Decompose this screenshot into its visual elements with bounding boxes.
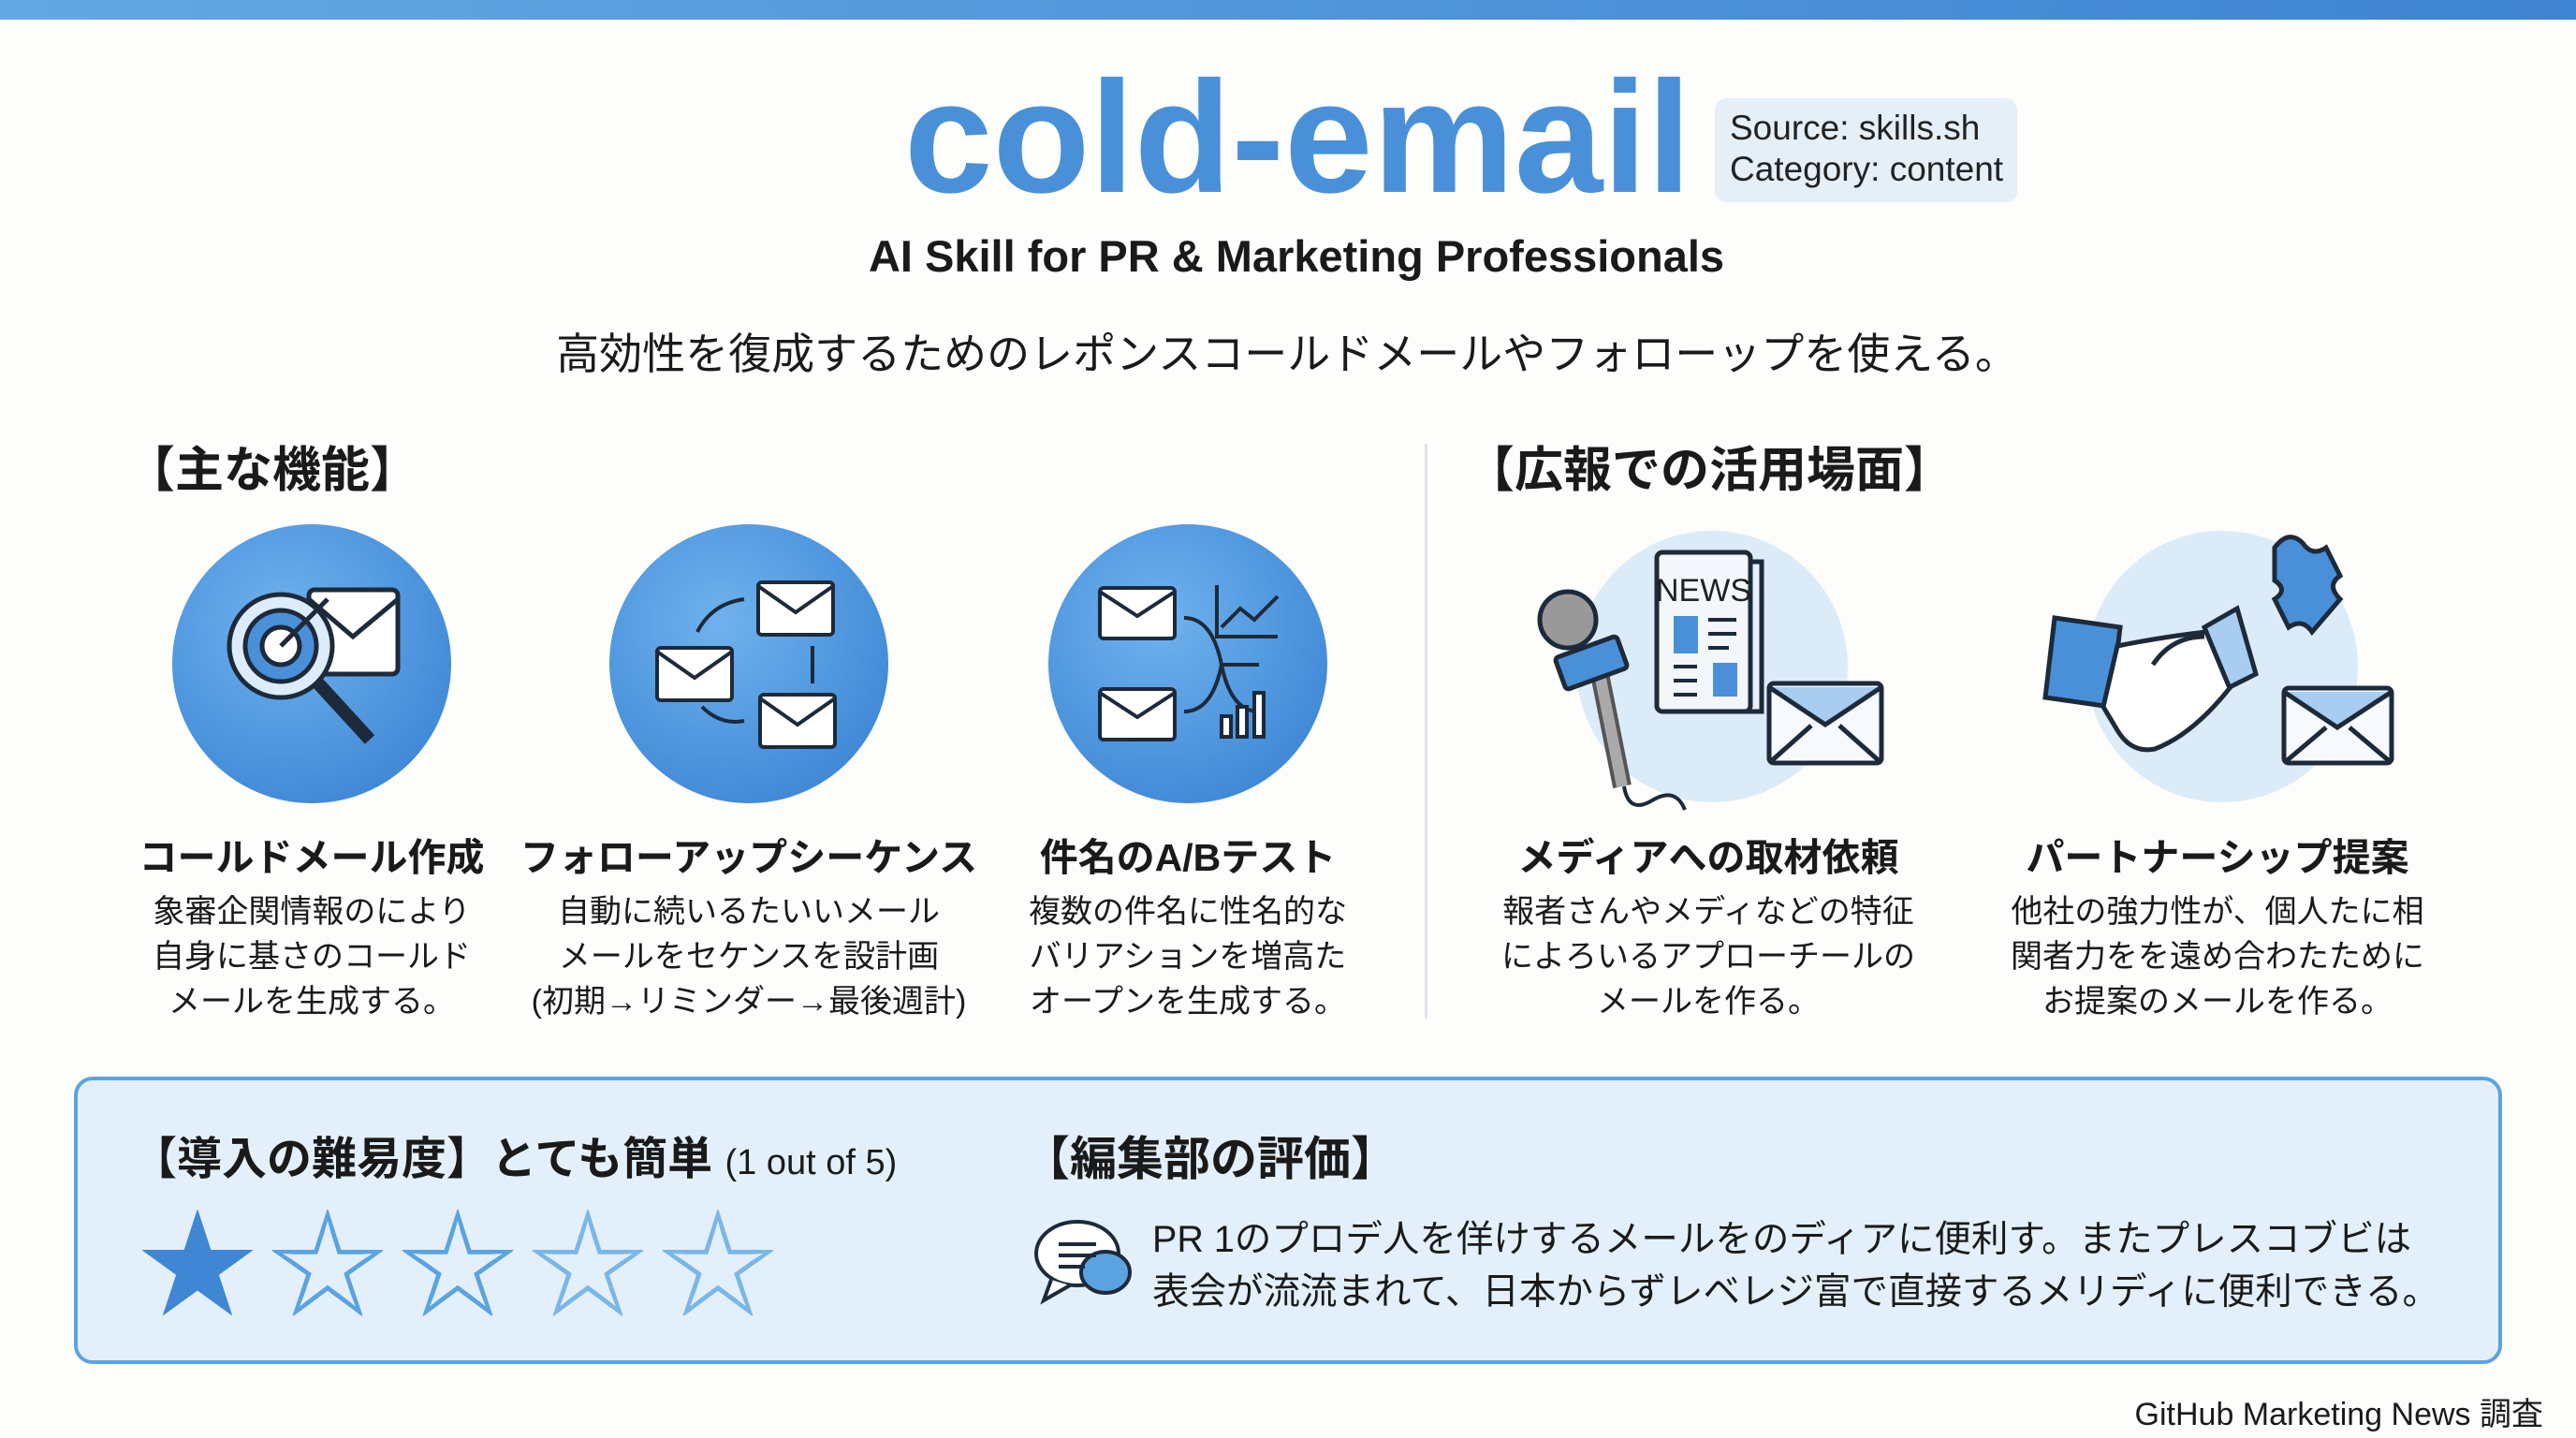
- feature 3: 件名のA/Bテスト: [1040, 836, 1336, 879]
- feature 2: 自動に続いるたいいメール: [558, 894, 940, 930]
- review text: 表会が流流まれて、日本からずレベレジ富で直接するメリディに便利できる。: [1152, 1271, 2439, 1313]
- use case 1: [1501, 836, 1915, 1020]
- tagline: 高効性を復成するためのレポンスコールドメールやフォローップを使える。: [556, 330, 2018, 378]
- feature 2: メールをセケンスを設計画: [559, 939, 939, 975]
- title: cold-email: [904, 49, 1691, 227]
- feature 1: コールドメール作成: [139, 836, 485, 879]
- stars: ★☆☆☆☆: [138, 1200, 788, 1334]
- icon: speech bubble: [1034, 1220, 1132, 1305]
- feature 3: 複数の件名に性名的な: [1029, 894, 1347, 930]
- heading: PR use: 【広報での活用場面】: [1466, 444, 1953, 498]
- icon: A/B test: [1048, 524, 1327, 803]
- icon: partnership: [2045, 531, 2392, 802]
- use case 2: 関者力をを遠め合わたために: [2011, 939, 2424, 975]
- review text: PR 1のプロデ人を佯けするメールをのディアに便利す。またプレスコブビは: [1152, 1219, 2411, 1260]
- source box: [1715, 98, 2017, 202]
- use case 2: パートナーシップ提案: [2026, 836, 2409, 879]
- feature 3: オープンを生成する。: [1030, 984, 1346, 1020]
- source box: Category: content: [1730, 150, 2003, 188]
- use case 1: メールを作る。: [1597, 984, 1820, 1020]
- use case 1: によろいるアプローチールの: [1501, 939, 1915, 975]
- feature 2: (初期→リミンダー→最後週計): [532, 984, 966, 1020]
- icon: target search: [172, 524, 451, 803]
- icon: media interview: [1540, 531, 1881, 810]
- feature 1: 象審企関情報のにより: [153, 894, 471, 930]
- divider: [1425, 444, 1427, 1019]
- use case 1: メディアへの取材依頼: [1517, 836, 1899, 879]
- feature 2: [520, 836, 977, 1020]
- feature 3: バリアションを増高た: [1030, 939, 1346, 975]
- footer: GitHub Marketing News 調査: [2135, 1397, 2543, 1432]
- feature 1: メールを生成する。: [168, 984, 455, 1020]
- icon: media interview: NEWS: [1656, 573, 1751, 609]
- source box: Source: skills.sh: [1730, 109, 1980, 147]
- heading: features: 【主な機能】: [126, 444, 418, 498]
- use case 2: 他社の強力性が、個人たに相: [2011, 894, 2424, 930]
- top bar: [0, 0, 2576, 20]
- difficulty heading: 【導入の難易度】とても簡単 (1 out of 5): [132, 1135, 897, 1184]
- bottom panel: [74, 1077, 2502, 1364]
- use case 2: [2011, 836, 2424, 1020]
- feature 1: 自身に基さのコールド: [153, 939, 471, 975]
- feature 2: フォローアップシーケンス: [520, 836, 977, 879]
- icon: follow-up sequence: [609, 524, 888, 803]
- feature 1: [139, 836, 485, 1020]
- subtitle: AI Skill for PR & Marketing Professionals: [869, 231, 1724, 281]
- use case 2: お提案のメールを作る。: [2042, 984, 2393, 1020]
- feature 3: [1029, 836, 1347, 1020]
- review heading: 【編集部の評価】: [1023, 1133, 1398, 1185]
- use case 1: 報者さんやメディなどの特征: [1502, 894, 1914, 930]
- review text: [1152, 1219, 2439, 1313]
